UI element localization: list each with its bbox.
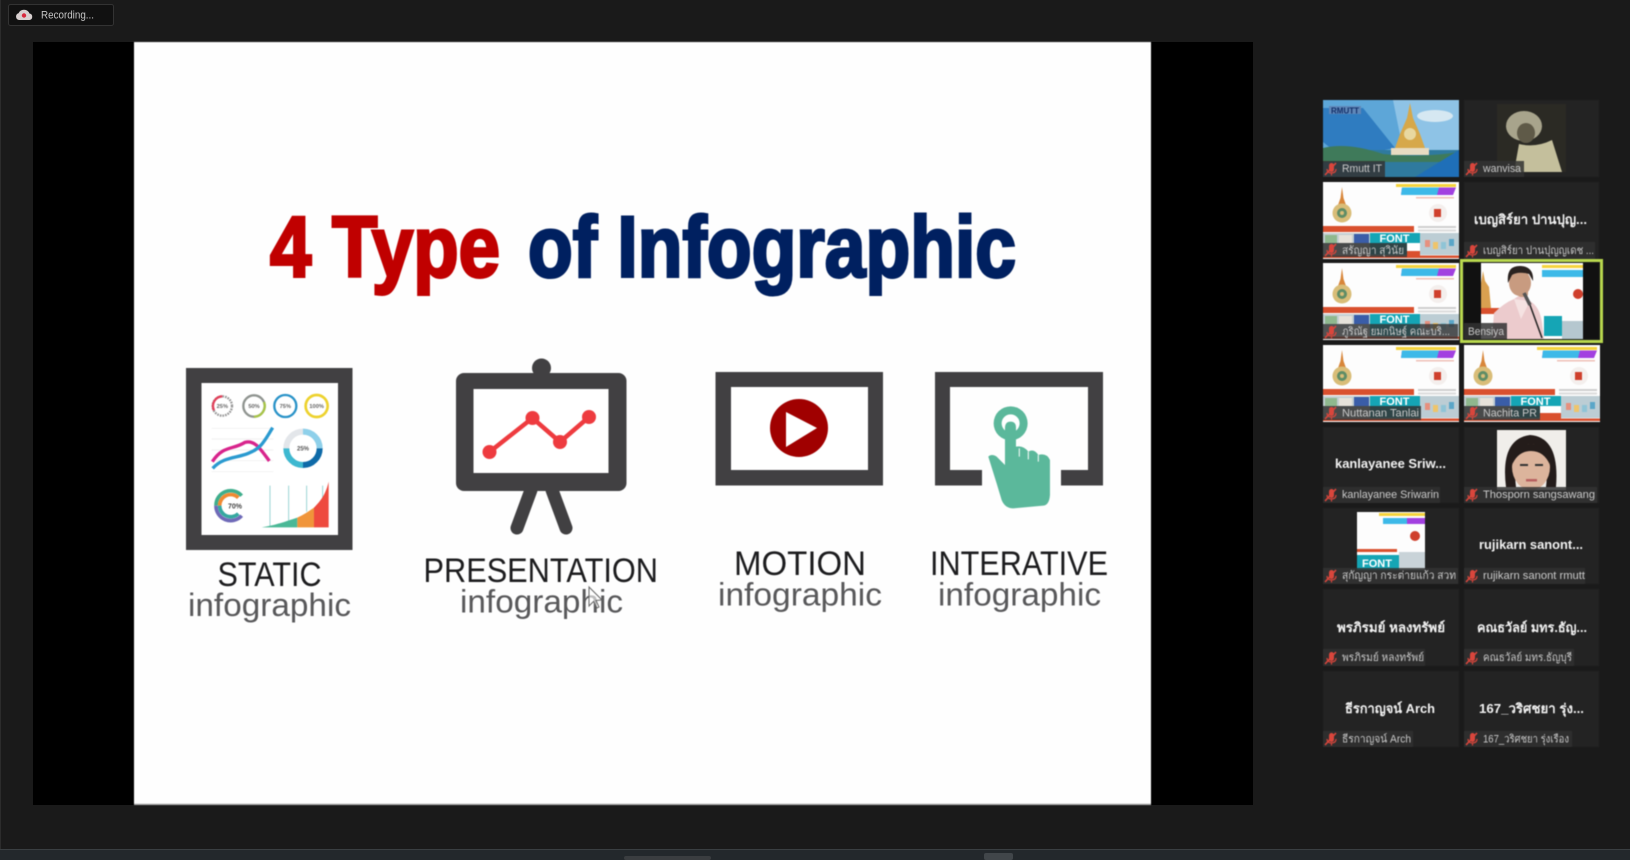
tile: Rmutt IT: [1323, 100, 1459, 177]
tile: kanlayanee Sriwarin: [1323, 427, 1459, 503]
label: static: STATIC: [218, 556, 322, 594]
title: 4 Type: [270, 200, 500, 296]
icon: recording cloud: [16, 10, 32, 20]
tile: 167_วริศชยา: [1464, 671, 1599, 747]
tile: wanvisa: [1464, 100, 1599, 177]
label: interative: infographic: [938, 576, 1101, 612]
progress rings: 25%: [217, 404, 228, 410]
label: interative: [930, 545, 1108, 612]
icon: touch screen: [935, 372, 1103, 508]
panel: motion infographic: [716, 372, 883, 612]
participant gallery: [1323, 100, 1602, 747]
panel: interactive infographic: [930, 372, 1108, 612]
tile: Thosporn sangsawang: Thosporn sangsawang: [1483, 489, 1595, 501]
area chart: [262, 482, 329, 527]
recording label: Recording...: [41, 10, 94, 22]
panel: static infographic: [186, 368, 352, 623]
donut chart: 25%: [297, 446, 310, 452]
title: of Infographic: [528, 200, 1016, 296]
tile: สุกัญญา: สุกัญญา กระต่ายแก้ว สวท: [1342, 570, 1456, 582]
tile: เบญสิร์ยา: เบญสิร์ยา ปานปุญญเดช ...: [1483, 244, 1594, 257]
icon: presentation easel: [456, 358, 626, 528]
tile: Rmutt IT: RMUTT: [1331, 106, 1359, 116]
tile: ภูริณัฐ: [1323, 263, 1459, 340]
progress rings: 75%: [280, 404, 291, 410]
tile: Bensiya active speaker: Bensiya: [1468, 326, 1505, 338]
tile: rujikarn sanont: [1464, 508, 1599, 584]
tile: rujikarn sanont: rujikarn sanont rmutt: [1483, 570, 1585, 582]
label: motion: [718, 545, 882, 612]
tile: ธีรกาญจน์ Arch: [1323, 671, 1459, 747]
tile: kanlayanee Sriwarin: kanlayanee Sriw...: [1335, 456, 1446, 471]
tile: พรภิรมย์: พรภิรมย์ หลงทรัพย์: [1342, 651, 1424, 664]
tile: Nuttanan Tanlai: [1323, 345, 1459, 422]
tile: wanvisa: wanvisa: [1482, 163, 1522, 175]
label: static: [188, 556, 351, 623]
tile: เบญสิร์ยา: เบญสิร์ยา ปานปุญ...: [1474, 212, 1587, 228]
radial gauge: 70%: [228, 503, 243, 510]
label: static: infographic: [188, 587, 351, 623]
line graph: [482, 410, 596, 459]
icon: poster frame with charts: [186, 368, 352, 550]
line chart: [212, 428, 273, 472]
tile: Bensiya active speaker: [1462, 260, 1602, 342]
tile: สุกัญญา: FONT: [1362, 558, 1392, 570]
label: motion: infographic: [718, 576, 882, 612]
label: interative: INTERATIVE: [930, 545, 1108, 583]
tile: สรัญญา สุวินัย: สรัญญา สุวินัย: [1342, 245, 1404, 257]
label: presentation: PRESENTATION: [424, 552, 658, 590]
progress rings: 50%: [248, 404, 260, 410]
tile: ธีรกาญจน์ Arch: ธีรกาญจน์ Arch: [1342, 732, 1411, 746]
icon: tapping hand: [988, 406, 1050, 508]
label: presentation: infographic: [460, 584, 623, 620]
tile: คณธวัลย์: คณธวัลย์ มทร.ธัญ...: [1477, 620, 1587, 636]
tile: Rmutt IT: Rmutt IT: [1342, 163, 1382, 175]
tile: เบญสิร์ยา: [1464, 182, 1599, 259]
label: presentation: [424, 552, 658, 620]
tile: ภูริณัฐ: ภูริณัฐ ยมกนิษฐ์ คณะบริ...: [1342, 325, 1450, 338]
tile: Nuttanan Tanlai: FONT: [1380, 396, 1410, 408]
tile: สุกัญญา: [1323, 508, 1459, 584]
title: [270, 200, 1016, 296]
tile: Nachita PR: Nachita PR: [1483, 408, 1537, 420]
icon: video player: [716, 372, 883, 486]
tile: 167_วริศชยา: 167_วริศชยา รุ่ง...: [1479, 701, 1584, 717]
shared screen: [33, 42, 1253, 805]
tile: พรภิรมย์: พรภิรมย์ หลงทรัพย์: [1337, 620, 1445, 635]
tile: คณธวัลย์: คณธวัลย์ มทร.ธัญบุรี: [1483, 651, 1572, 664]
progress rings: 100%: [309, 404, 324, 410]
label: motion: MOTION: [734, 545, 866, 583]
tile: พรภิรมย์: [1323, 589, 1459, 666]
tile: Nachita PR: FONT: [1521, 396, 1551, 408]
tile: ภูริณัฐ: FONT: [1380, 314, 1410, 326]
tile: Nachita PR: [1464, 345, 1600, 422]
bottom toolbar: [0, 849, 1630, 860]
tile: คณธวัลย์: [1464, 589, 1599, 666]
recording badge: [8, 4, 114, 26]
tile: 167_วริศชยา: 167_วริศชยา รุ่งเรือง: [1483, 732, 1569, 746]
slide: [134, 42, 1151, 805]
progress rings: [213, 395, 328, 417]
tile: สรัญญา สุวินัย: [1323, 182, 1459, 259]
tile: kanlayanee Sriwarin: kanlayanee Sriwarin: [1342, 489, 1439, 501]
tile: rujikarn sanont: rujikarn sanont...: [1479, 537, 1583, 552]
tile: Nuttanan Tanlai: Nuttanan Tanlai: [1342, 408, 1419, 420]
tile: ธีรกาญจน์ Arch: ธีรกาญจน์ Arch: [1345, 701, 1435, 717]
tile: สรัญญา สุวินัย: FONT: [1380, 233, 1410, 245]
icon: mouse cursor: [589, 587, 602, 608]
tile: Thosporn sangsawang: [1464, 427, 1599, 503]
panel: presentation infographic: [424, 358, 658, 620]
